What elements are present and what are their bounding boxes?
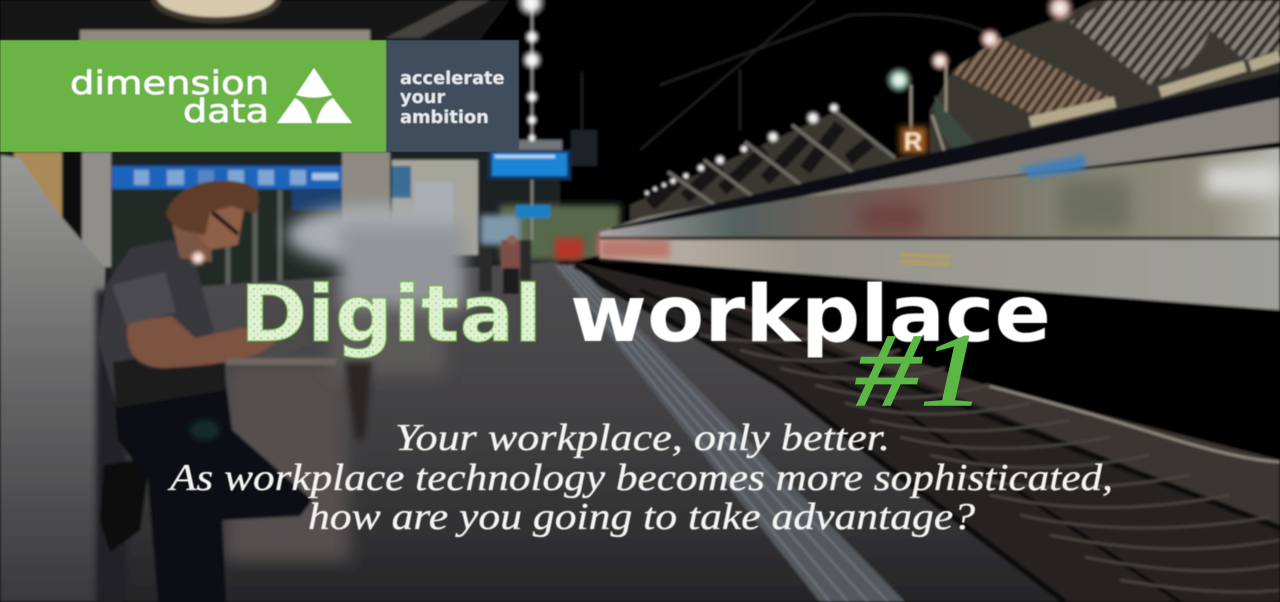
far leg and shoe — [100, 458, 150, 552]
beige ledge above logo — [80, 30, 370, 42]
title word: Digital: Digital — [240, 270, 542, 360]
striped roof panel far right — [1175, 0, 1280, 60]
hair — [166, 181, 259, 235]
man using a tablet — [98, 181, 313, 602]
roof ribs — [650, 125, 870, 205]
issue number: #1 — [855, 313, 985, 428]
train lower body — [600, 240, 1280, 310]
hall doors — [228, 190, 280, 330]
blue stripe on train — [1020, 155, 1085, 178]
ballast beside track — [690, 288, 1280, 528]
glasses — [212, 212, 238, 234]
station ceiling, upper left — [0, 0, 510, 40]
small blue sign — [516, 205, 550, 218]
lamp glows — [516, 0, 1075, 196]
lower t-shirt shadow — [113, 345, 226, 408]
lamp masts — [911, 65, 950, 168]
t-shirt — [98, 240, 225, 405]
R platform sign — [900, 127, 927, 156]
tactile strip on platform — [553, 265, 905, 602]
left concrete pillar — [0, 155, 105, 602]
train window reflections — [860, 165, 1280, 230]
lamp post — [531, 0, 533, 240]
light cable on ballast — [985, 385, 1280, 462]
pillar shadow edge — [96, 290, 126, 602]
tagline: your — [400, 87, 445, 108]
red train blur — [600, 240, 670, 258]
track bed — [575, 262, 1280, 602]
overhead wires — [582, 0, 990, 150]
subtitle text block — [167, 417, 1113, 538]
back wall by ledge — [225, 365, 350, 560]
R platform sign: R — [904, 128, 922, 156]
green logo panel — [0, 40, 386, 152]
tan wall strip — [14, 152, 64, 222]
distant end of hall — [480, 205, 642, 260]
ghost leg — [345, 362, 372, 440]
slate tagline panel — [386, 40, 519, 152]
icon: triangle logo — [277, 68, 352, 123]
jeans highlight — [190, 420, 220, 440]
wall poster — [415, 182, 453, 232]
train window sill — [600, 237, 1280, 239]
ceiling beam — [385, 0, 490, 38]
concrete column — [82, 152, 111, 267]
blurred passer-by — [287, 205, 465, 375]
tablet — [262, 326, 313, 361]
small blue posters — [292, 190, 342, 210]
train under-side shadow — [575, 255, 1280, 410]
roof rib highlights — [668, 112, 895, 205]
sleeve — [112, 272, 176, 325]
blue departure display — [488, 140, 571, 180]
blue direction sign — [112, 166, 343, 189]
yellow train marking — [900, 255, 950, 264]
train upper body — [600, 95, 1280, 240]
title word: workplace: workplace — [570, 270, 1051, 360]
near rail — [640, 290, 1180, 602]
dark hanging box — [571, 130, 597, 166]
striped roof panel right — [1070, 0, 1225, 85]
logo banner — [0, 40, 519, 152]
white wall — [392, 160, 478, 255]
train window band — [600, 148, 1280, 238]
title — [240, 270, 1051, 360]
ceiling clock — [154, 0, 278, 20]
subtitle line 1: Your workplace, only better. — [395, 417, 890, 459]
blue wall panel — [392, 166, 411, 198]
tagline: ambition — [400, 107, 489, 128]
ledge under tablet — [226, 358, 336, 365]
green roof hood — [935, 95, 990, 165]
beige roof beams — [1030, 56, 1280, 122]
dark doorway — [62, 152, 84, 262]
tagline: accelerate — [400, 68, 505, 89]
platform floor — [0, 262, 1065, 602]
distant people — [479, 235, 531, 294]
glass hall — [111, 188, 343, 298]
roof structure — [630, 0, 1280, 220]
logo wordmark: data — [183, 92, 269, 130]
logo wordmark: dimension — [70, 64, 269, 102]
second column — [342, 152, 390, 222]
arm — [127, 316, 280, 368]
man's jeans — [115, 385, 312, 602]
brown striped roof panel — [950, 38, 1115, 118]
train roof edge — [610, 72, 1280, 234]
subtitle line 3: how are you going to take advantage? — [308, 496, 975, 538]
rail sleepers — [700, 330, 1280, 592]
rails — [575, 265, 1280, 602]
subtitle line 2: As workplace technology becomes more sophisticated, — [167, 457, 1113, 499]
left station wall backdrop — [0, 152, 560, 312]
face — [198, 200, 245, 250]
earring glare — [189, 249, 207, 267]
neck — [172, 222, 212, 262]
